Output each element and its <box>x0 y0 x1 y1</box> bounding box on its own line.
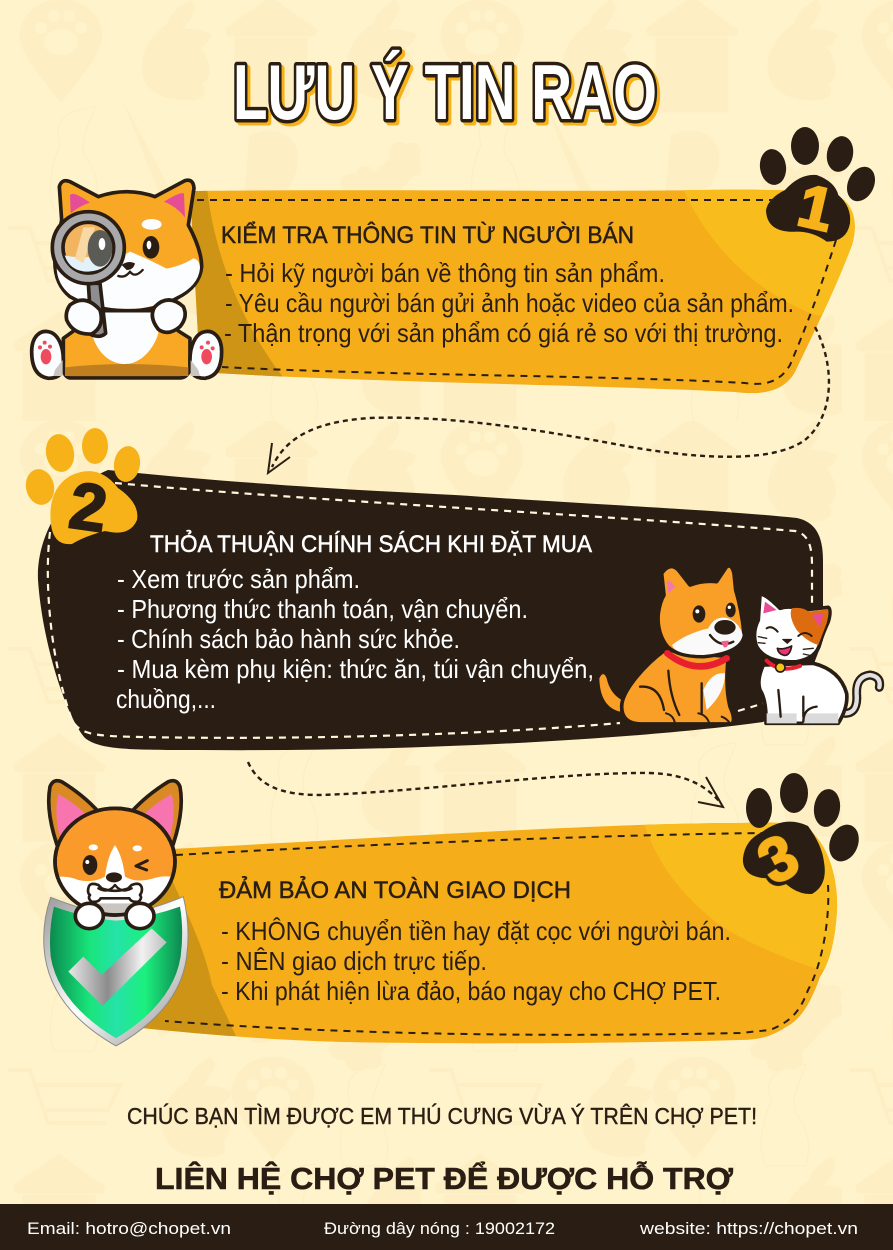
footer hotline: Đường dây nóng : 19002172 <box>324 1219 555 1238</box>
dog <box>599 566 744 724</box>
paw pad <box>50 471 137 544</box>
paw toes <box>746 773 864 866</box>
panel 3 body: - NÊN giao dịch trực tiếp. <box>221 946 487 976</box>
panel 2 body <box>116 564 594 714</box>
panel 3 body: - KHÔNG chuyển tiền hay đặt cọc với người bán. <box>221 916 731 946</box>
panel 1 heading: KIỂM TRA THÔNG TIN TỪ NGƯỜI BÁN <box>221 221 634 249</box>
paw badge 2 <box>23 428 142 546</box>
panel 3 dashed border <box>165 833 828 1035</box>
mascot: shiba with magnifier <box>32 180 222 378</box>
arrow: step 1 to step 2 <box>268 327 829 473</box>
panel 1 dashed border <box>197 200 836 384</box>
panel 3 body: - Khi phát hiện lừa đảo, báo ngay cho CHỢ PET. <box>221 976 721 1006</box>
panel 1 body: - Hỏi kỹ người bán về thông tin sản phẩm. <box>225 258 665 288</box>
panel 2 dashed border <box>48 483 812 738</box>
number 2: 2 <box>65 468 112 546</box>
panel 3 background <box>142 823 837 1043</box>
panel 3 shading <box>130 815 850 1036</box>
number 1: 1 <box>792 171 840 244</box>
panel 2 body: chuồng,... <box>116 684 216 714</box>
paw toes <box>23 428 142 508</box>
panel 2 body: - Mua kèm phụ kiện: thức ăn, túi vận chuyển, <box>117 654 594 684</box>
closing message: CHÚC BẠN TÌM ĐƯỢC EM THÚ CƯNG VỪA Ý TRÊN CHỢ PET! <box>127 1103 757 1129</box>
title: LƯU Ý TIN RAO <box>233 48 657 136</box>
mascot: dog and cat <box>599 566 880 724</box>
contact heading: LIÊN HỆ CHỢ PET ĐỂ ĐƯỢC HỖ TRỢ <box>155 1160 734 1196</box>
panel 2 body: - Phương thức thanh toán, vận chuyển. <box>117 594 528 624</box>
paw badge 3 <box>743 773 864 898</box>
footer website: website: https://chopet.vn <box>639 1219 858 1238</box>
panel 1 body: - Yêu cầu người bán gửi ảnh hoặc video của sản phẩm. <box>225 288 794 318</box>
footer bar <box>0 1204 893 1250</box>
paw pad <box>743 822 825 894</box>
panel: step 2 <box>38 470 823 750</box>
mascot: corgi on shield <box>44 781 188 1046</box>
number 3: 3 <box>747 821 810 898</box>
cat <box>755 594 880 723</box>
panel: step 3 <box>130 815 850 1043</box>
panel 2 heading: THỎA THUẬN CHÍNH SÁCH KHI ĐẶT MUA <box>150 529 592 558</box>
paw badge 1 <box>758 127 880 244</box>
panel 2 body: - Chính sách bảo hành sức khỏe. <box>117 624 460 654</box>
panel 2 body: - Xem trước sản phẩm. <box>117 564 360 594</box>
paw toes <box>758 127 880 206</box>
panel 1 shading <box>185 185 870 382</box>
paw pad <box>766 175 850 242</box>
panel 1 body: - Thận trọng với sản phẩm có giá rẻ so với thị trường. <box>224 318 783 348</box>
footer email: Email: hotro@chopet.vn <box>27 1219 231 1238</box>
panel 3 heading: ĐẢM BẢO AN TOÀN GIAO DỊCH <box>219 875 571 904</box>
panel 3 body <box>221 916 731 1006</box>
panel 2 background <box>38 470 823 750</box>
panel 1 body <box>224 258 794 348</box>
corgi <box>49 781 181 929</box>
arrow: step 2 to step 3 <box>248 762 723 807</box>
panel 1 background <box>190 190 855 393</box>
shield <box>44 897 188 1046</box>
panel: step 1 <box>185 185 870 393</box>
